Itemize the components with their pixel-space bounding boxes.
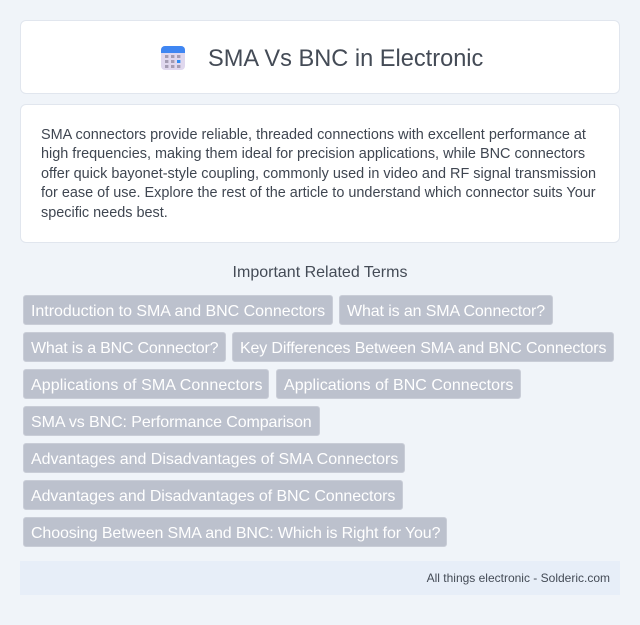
related terms heading: Important Related Terms: [233, 264, 407, 281]
intro paragraph: specific needs best.: [41, 205, 168, 221]
tag: [232, 332, 614, 362]
intro paragraph: offer quick bayonet-style coupling, commonly used in video and RF signal transmission: [41, 166, 596, 182]
tag: Introduction to SMA and BNC Connectors: [31, 303, 325, 320]
tag list: [23, 295, 614, 547]
tag: Advantages and Disadvantages of SMA Connectors: [31, 451, 398, 468]
tag: [276, 369, 521, 399]
tag: What is a BNC Connector?: [31, 340, 218, 357]
tag: [23, 295, 333, 325]
tag: SMA vs BNC: Performance Comparison: [31, 414, 312, 431]
tag: What is an SMA Connector?: [347, 303, 545, 320]
footer credit: All things electronic - Solderic.com: [427, 571, 610, 585]
tag: [23, 517, 447, 547]
tag: Advantages and Disadvantages of BNC Connectors: [31, 488, 395, 505]
header panel: [20, 20, 620, 94]
intro paragraph: [41, 127, 596, 221]
icon: calendar grid: [161, 46, 185, 70]
tag: Choosing Between SMA and BNC: Which is Right for You?: [31, 525, 440, 542]
tag: Applications of BNC Connectors: [284, 377, 513, 394]
intro paragraph: for ease of use. Explore the rest of the article to understand which connector suits Your: [41, 185, 596, 201]
tag: [23, 480, 403, 510]
footer bar: [20, 561, 620, 595]
tag: [23, 332, 226, 362]
tag: [339, 295, 553, 325]
tag: [23, 369, 269, 399]
tag: Applications of SMA Connectors: [31, 377, 263, 394]
tag: Key Differences Between SMA and BNC Connectors: [240, 340, 606, 357]
title: SMA Vs BNC in Electronic: [208, 46, 483, 72]
tag: [23, 443, 405, 473]
tag: [23, 406, 320, 436]
intro text panel: [20, 104, 620, 243]
intro paragraph: SMA connectors provide reliable, threaded connections with excellent performance at: [41, 127, 586, 143]
intro paragraph: high frequencies, making them ideal for precision applications, while BNC connectors: [41, 146, 585, 162]
